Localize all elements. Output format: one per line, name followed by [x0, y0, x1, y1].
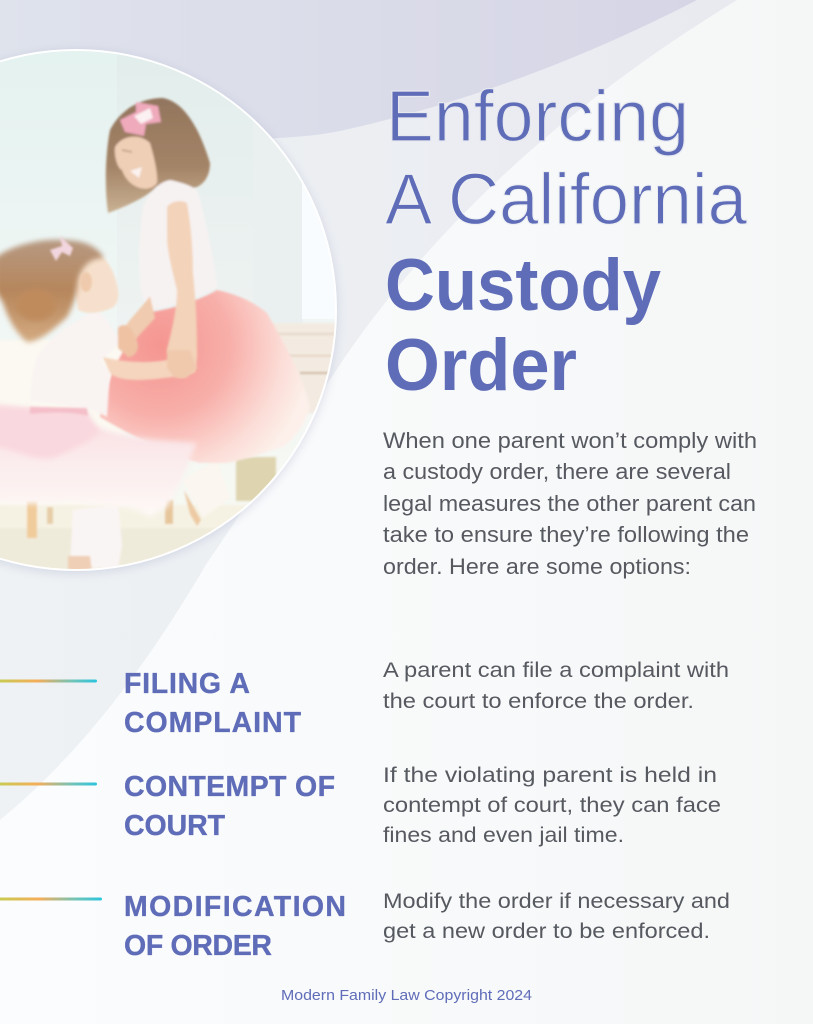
hair: [0, 240, 104, 342]
heading: modification of order: MODIFICATION: [124, 891, 346, 923]
heading: modification of order: [124, 891, 346, 962]
title line: Custody: Custody: [385, 245, 661, 326]
intro paragraph: order. Here are some options:: [383, 554, 691, 579]
bench slats: [274, 323, 334, 413]
gradient line 3: [0, 898, 102, 900]
heading: modification of order: OF ORDER: [124, 930, 272, 962]
soft photo wash: [0, 100, 208, 323]
description: contempt of court: fines and even jail time.: [383, 824, 624, 847]
option 3: modification of order: [0, 890, 730, 962]
footer copyright: Modern Family Law Copyright 2024: [281, 988, 532, 1004]
heading: contempt of court: CONTEMPT OF: [124, 771, 335, 803]
arm: [103, 357, 180, 380]
intro paragraph: When one parent won’t comply with: [383, 428, 757, 453]
photo circle: two girls dancing: [0, 49, 340, 588]
clasped hands: [167, 350, 197, 378]
heading: contempt of court: [124, 771, 335, 842]
gradient line 2: [0, 782, 97, 786]
older girl: [100, 98, 310, 526]
title line: Enforcing: Enforcing: [386, 77, 689, 157]
legs: [198, 506, 217, 516]
description: modification of order: Modify the order if necessary and: [383, 890, 730, 913]
hair back: [106, 98, 210, 213]
heading: filing a complaint: [124, 668, 302, 739]
gradient line 1: [0, 680, 97, 682]
forearm to clasped hands: [125, 296, 156, 339]
description: contempt of court: contempt of court, they can face: [383, 794, 721, 817]
background shape: top lavender arc: [0, 0, 697, 160]
title line: Order: Order: [385, 325, 577, 406]
option 2: contempt of court: [0, 764, 721, 847]
bow: [120, 102, 161, 136]
younger girl: [0, 236, 197, 572]
heading: contempt of court: COURT: [124, 810, 226, 842]
tulle skirt: [0, 403, 197, 517]
description: contempt of court: If the violating parent is held in: [383, 764, 717, 787]
title: [385, 77, 748, 406]
window light: [302, 183, 338, 319]
intro paragraph: a custody order, there are several: [383, 459, 731, 484]
shirt: [139, 180, 217, 310]
tutu: [100, 290, 310, 463]
bow: [50, 236, 73, 261]
option 1: filing a complaint: [0, 659, 729, 739]
description: contempt of court: [383, 764, 721, 847]
legs: [70, 505, 122, 568]
background shape: middle swoosh: [0, 0, 737, 820]
description: modification of order: [383, 890, 730, 943]
shirt: [56, 314, 114, 418]
description: filing a complaint: A parent can file a complaint with: [383, 659, 729, 682]
face: [115, 137, 157, 189]
arm: [167, 201, 197, 378]
description: modification of order: get a new order to be enforced.: [383, 920, 710, 943]
intro paragraph: [383, 428, 757, 579]
description: filing a complaint: the court to enforce the order.: [383, 690, 694, 713]
intro paragraph: legal measures the other parent can: [383, 491, 756, 516]
heading: filing a complaint: COMPLAINT: [124, 707, 302, 739]
heading: filing a complaint: FILING A: [124, 668, 250, 700]
title line: A California: A California: [385, 160, 748, 240]
ear: [80, 272, 92, 292]
face: [74, 250, 118, 313]
description: filing a complaint: [383, 659, 729, 713]
intro paragraph: take to ensure they’re following the: [383, 522, 749, 547]
sofa and floor: [0, 341, 277, 569]
